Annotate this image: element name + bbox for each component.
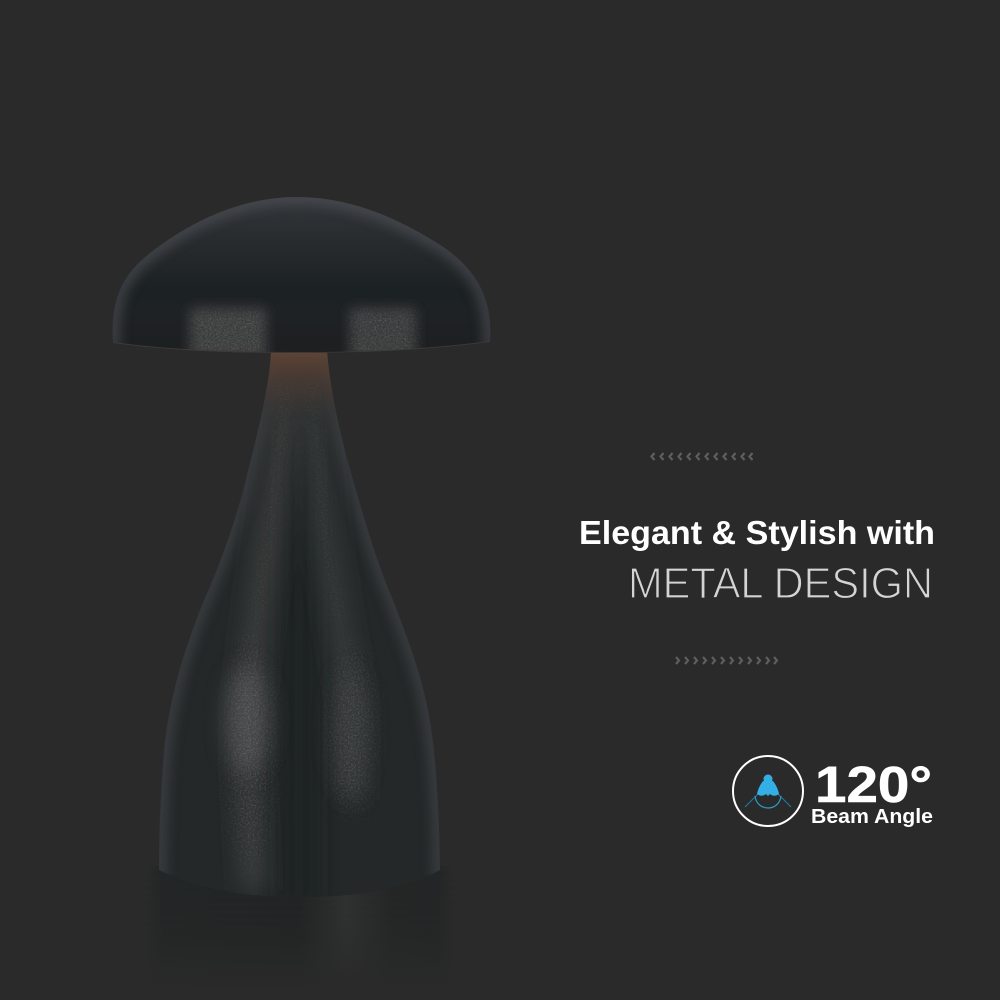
lamp body [150, 345, 450, 910]
stat: 120 degrees: 120° [815, 756, 932, 813]
icon: beam angle [733, 756, 803, 826]
label: Beam Angle: Beam Angle [811, 806, 933, 828]
heading: Elegant & Stylish with: Elegant & Stylish with [579, 514, 935, 551]
lamp reflection on the surface [234, 894, 302, 910]
divider: right chevrons [676, 657, 777, 664]
subheading: METAL DESIGN: METAL DESIGN [628, 559, 933, 608]
divider: left chevrons [652, 453, 752, 460]
lamp shade [112, 197, 490, 353]
lamp photo [105, 190, 495, 910]
